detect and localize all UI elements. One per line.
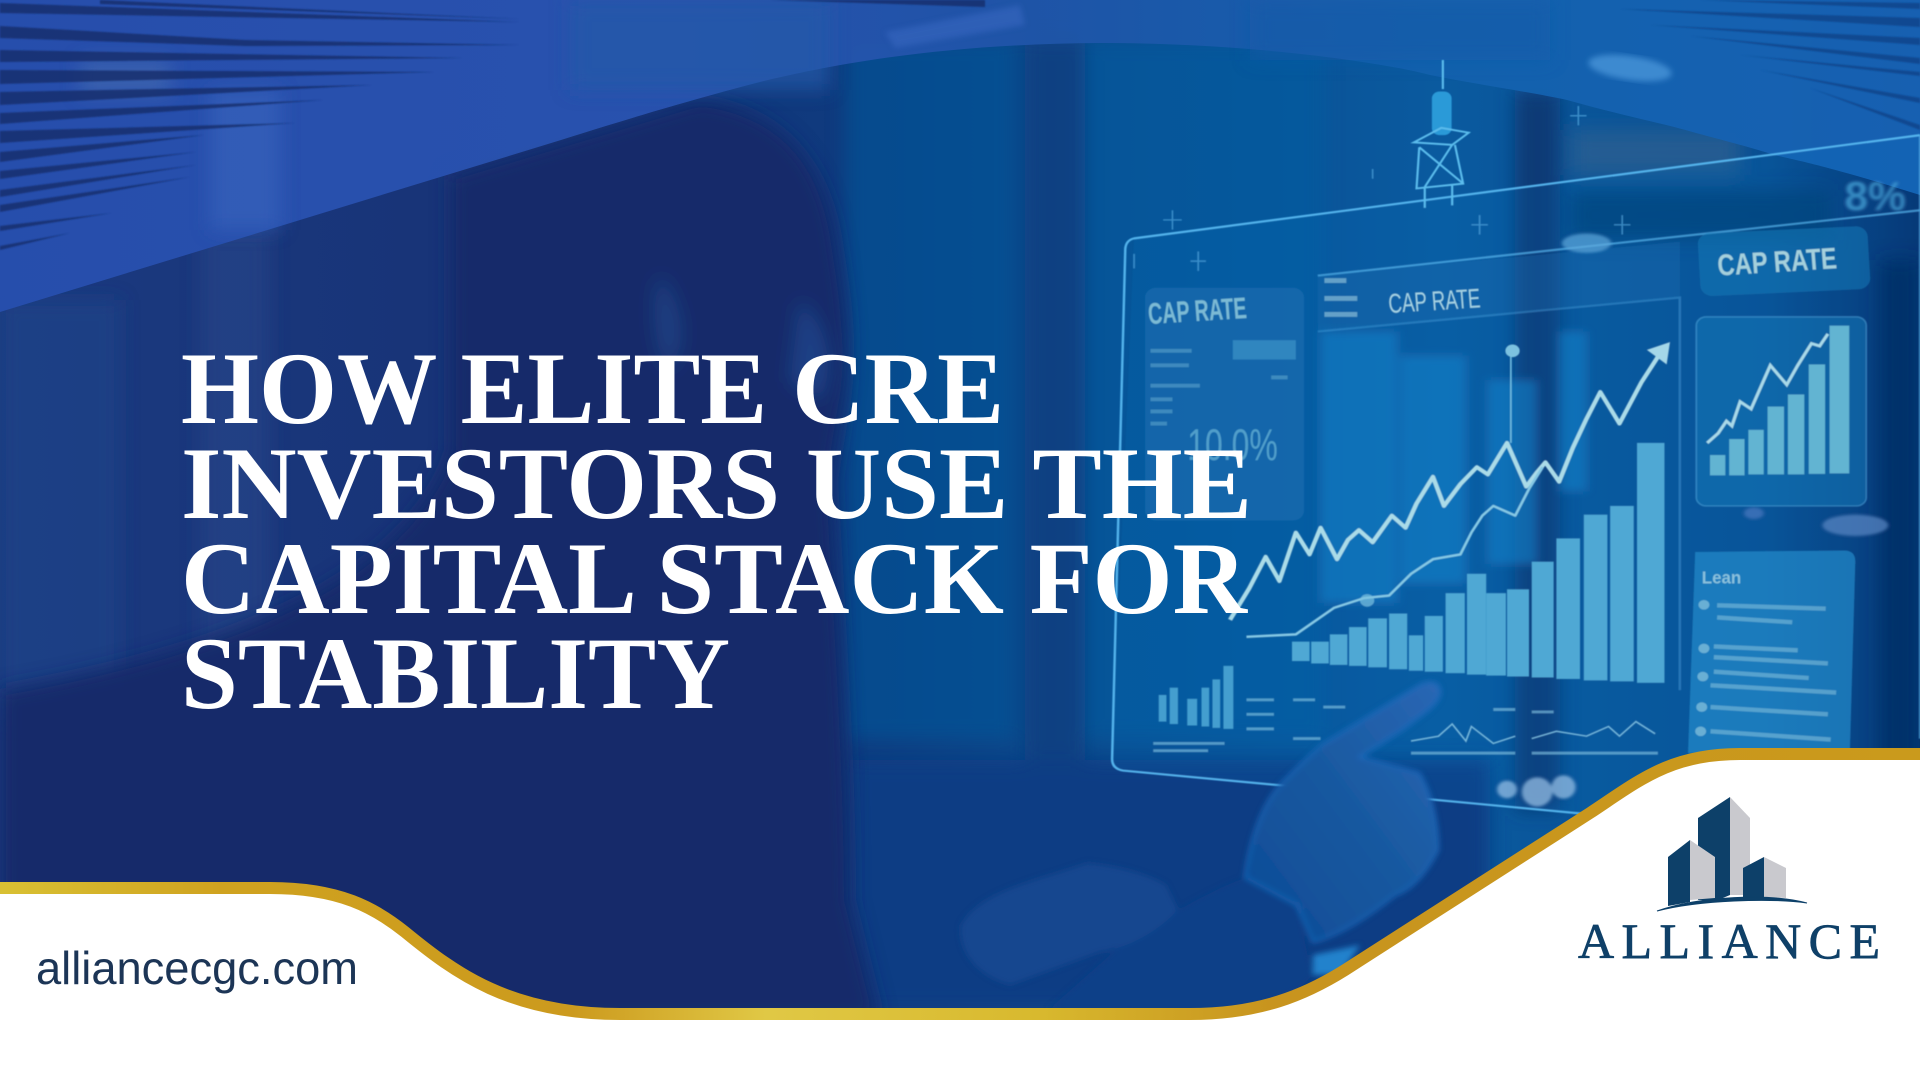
bottom white shape with gold edge [0, 754, 1920, 1080]
highlight streak: top band glow [1587, 50, 1673, 86]
blinds band: top curved overlay [0, 0, 1920, 312]
title: HOW ELITE CRE [181, 332, 1004, 446]
title: STABILITY [181, 617, 730, 731]
light vertical glow [80, 0, 1550, 230]
chart: lower left mini bars [1159, 666, 1233, 729]
logo: Alliance [1578, 797, 1880, 969]
icon: buildings [1657, 797, 1807, 911]
card: left cap rate [1145, 288, 1304, 520]
light diagonal bar [885, 5, 1025, 48]
hands and sleeve [961, 682, 1440, 1012]
chart: rising lines with arrow [1230, 342, 1670, 637]
chart backdrop glow [1321, 331, 1587, 603]
card: right cap rate [1697, 226, 1871, 297]
chart: right bar and line [1696, 317, 1866, 506]
chart: lower sparklines [1153, 700, 1658, 753]
card: left cap rate: CAP RATE [1147, 291, 1248, 331]
card: right cap rate: CAP RATE [1716, 241, 1838, 282]
icon: percent badge: 8% [1844, 174, 1906, 220]
dashboard glass fill [1112, 135, 1920, 820]
wordmark: ALLIANCE [1578, 913, 1880, 969]
icon: tower [1414, 60, 1469, 208]
blind slats left [0, 0, 985, 250]
card: middle cap rate [1318, 242, 1680, 331]
dashboard frame [1112, 135, 1920, 816]
blurred glow lights [1497, 234, 1888, 806]
title: INVESTORS USE THE [181, 427, 1252, 541]
panel: holographic dashboard [1112, 60, 1920, 820]
title: CAPITAL STACK FOR [181, 522, 1249, 636]
card: middle cap rate: CAP RATE [1387, 284, 1482, 320]
card: list panel: Lean [1702, 568, 1741, 587]
card: list panel [1688, 551, 1855, 753]
person silhouette [0, 100, 880, 1020]
chart: main bars [1292, 443, 1664, 683]
card: left cap rate: 10.0% [1187, 421, 1278, 470]
website url: alliancecgc.com [36, 942, 358, 994]
sparkle dots [1134, 106, 1630, 271]
title [181, 332, 1252, 731]
blind slats right [1620, 0, 1920, 130]
